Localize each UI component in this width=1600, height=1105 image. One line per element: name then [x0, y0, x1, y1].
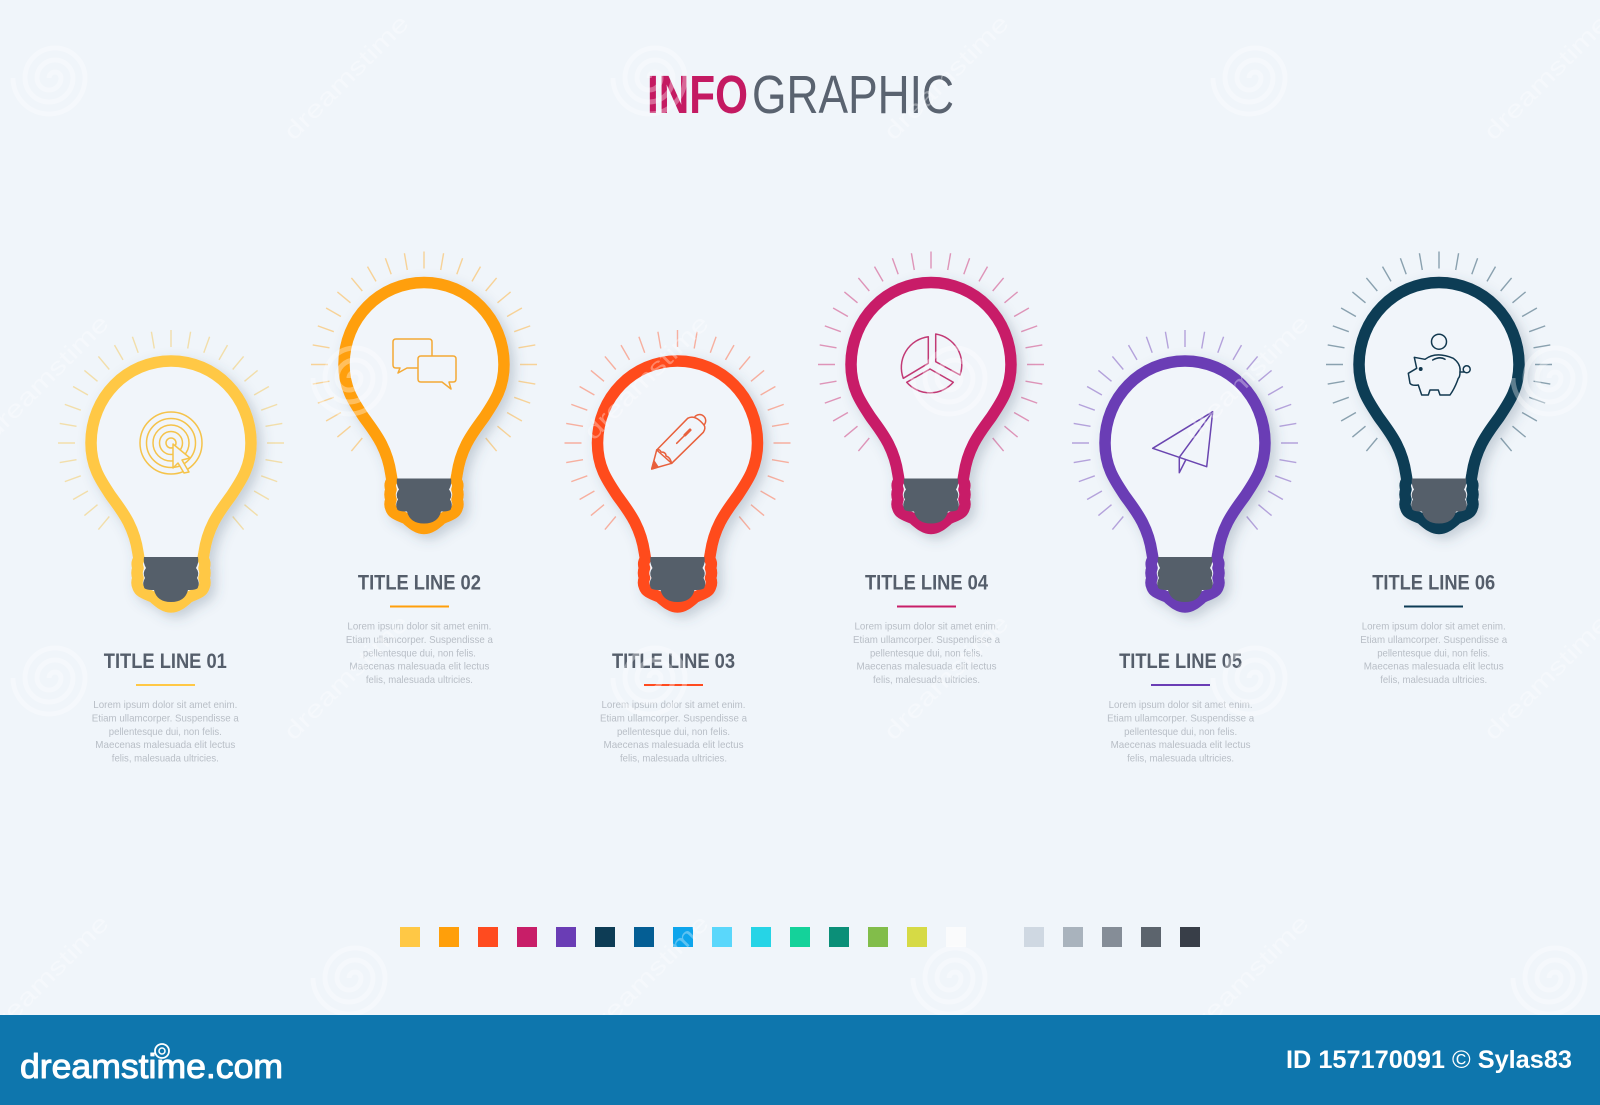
bulb 04: [851, 282, 1011, 528]
panel: step 04: [818, 252, 1044, 686]
heading 04: TITLE LINE 04: [865, 572, 988, 594]
watermark overlay: dreamstime: [579, 910, 715, 1046]
bulb 06: [1359, 282, 1519, 528]
text block 04: Maecenas malesuada elit lectus: [856, 660, 996, 672]
watermark overlay: dreamstime: [279, 610, 415, 746]
text block 05: Etiam ullamcorper. Suspendisse a: [1107, 712, 1254, 724]
icon: piggy bank: [1408, 334, 1470, 395]
footer bar: [0, 1015, 1600, 1105]
rays 02: [311, 252, 537, 451]
icon: target with cursor: [140, 412, 202, 474]
panel: step 05: [1072, 330, 1298, 764]
text block 04: pellentesque dui, non felis.: [870, 648, 983, 660]
text block 01: pellentesque dui, non felis.: [109, 726, 222, 738]
text block 03: felis, malesuada ultricies.: [620, 752, 727, 764]
colour palette swatches: [400, 927, 1200, 947]
watermark overlay: dreamstime: [1479, 610, 1600, 746]
icon: chat bubbles: [393, 339, 456, 389]
panel: step 02: [311, 252, 537, 686]
text block 03: Maecenas malesuada elit lectus: [604, 739, 744, 751]
watermark overlay: dreamstime: [879, 610, 1015, 746]
text block 05: Maecenas malesuada elit lectus: [1111, 739, 1251, 751]
bulb 01: [91, 361, 251, 607]
rays 01: [58, 330, 284, 530]
text block 06: Maecenas malesuada elit lectus: [1364, 660, 1504, 672]
text block 03: [600, 699, 747, 764]
text block 02: Maecenas malesuada elit lectus: [349, 660, 489, 672]
text block 02: [346, 620, 493, 686]
text block 01: Maecenas malesuada elit lectus: [95, 739, 235, 751]
text block 02: Etiam ullamcorper. Suspendisse a: [346, 634, 493, 646]
text block 06: felis, malesuada ultricies.: [1380, 674, 1487, 686]
heading 03: TITLE LINE 03: [612, 650, 735, 673]
title: GRAPHIC: [752, 65, 954, 125]
rays 05: [1072, 330, 1298, 530]
icon: pie chart: [901, 334, 962, 393]
panel: step 03: [564, 330, 790, 764]
text block 06: Lorem ipsum dolor sit amet enim.: [1362, 620, 1506, 632]
footer image id: ID 157170091 © Sylas83: [1286, 1046, 1572, 1074]
watermark overlay: dreamstime: [1179, 910, 1315, 1046]
text block 05: pellentesque dui, non felis.: [1124, 726, 1237, 738]
rays 06: [1326, 252, 1552, 451]
bulb 03: [598, 361, 758, 607]
rays 03: [564, 330, 790, 530]
watermark overlay: dreamstime: [579, 310, 715, 446]
text block 04: felis, malesuada ultricies.: [873, 674, 980, 686]
text block 05: [1107, 699, 1254, 764]
icon: paper plane: [1153, 412, 1213, 473]
text block 03: pellentesque dui, non felis.: [617, 726, 730, 738]
text block 02: pellentesque dui, non felis.: [363, 648, 476, 660]
text block 06: [1360, 620, 1507, 686]
icon: pen: [652, 415, 706, 469]
footer logo: dreamstime.com: [20, 1048, 283, 1086]
bulb 05: [1105, 361, 1265, 607]
text block 03: Etiam ullamcorper. Suspendisse a: [600, 712, 747, 724]
watermark overlay: dreamstime: [879, 10, 1015, 146]
text block 02: Lorem ipsum dolor sit amet enim.: [347, 620, 491, 632]
text block 01: [92, 699, 239, 764]
heading 02: TITLE LINE 02: [358, 572, 481, 594]
heading 06: TITLE LINE 06: [1372, 572, 1495, 594]
text block 04: [853, 620, 1000, 686]
title: INFO: [647, 65, 748, 125]
text block 01: felis, malesuada ultricies.: [112, 752, 219, 764]
text block 05: felis, malesuada ultricies.: [1127, 752, 1234, 764]
text block 06: pellentesque dui, non felis.: [1377, 648, 1490, 660]
text block 02: felis, malesuada ultricies.: [366, 674, 473, 686]
title: [647, 65, 954, 125]
panel: step 06: [1326, 252, 1552, 686]
panel: step 01: [58, 330, 284, 764]
heading 01: TITLE LINE 01: [104, 650, 227, 673]
text block 04: Etiam ullamcorper. Suspendisse a: [853, 634, 1000, 646]
heading 05: TITLE LINE 05: [1119, 650, 1242, 673]
text block 01: Lorem ipsum dolor sit amet enim.: [93, 699, 237, 711]
watermark overlay: dreamstime: [1479, 10, 1600, 146]
bulb 02: [344, 282, 504, 528]
text block 04: Lorem ipsum dolor sit amet enim.: [854, 620, 998, 632]
text block 06: Etiam ullamcorper. Suspendisse a: [1360, 634, 1507, 646]
watermark overlay: dreamstime: [1179, 310, 1315, 446]
text block 03: Lorem ipsum dolor sit amet enim.: [602, 699, 746, 711]
watermark overlay: dreamstime: [279, 10, 415, 146]
text block 01: Etiam ullamcorper. Suspendisse a: [92, 712, 239, 724]
text block 05: Lorem ipsum dolor sit amet enim.: [1109, 699, 1253, 711]
rays 04: [818, 252, 1044, 451]
